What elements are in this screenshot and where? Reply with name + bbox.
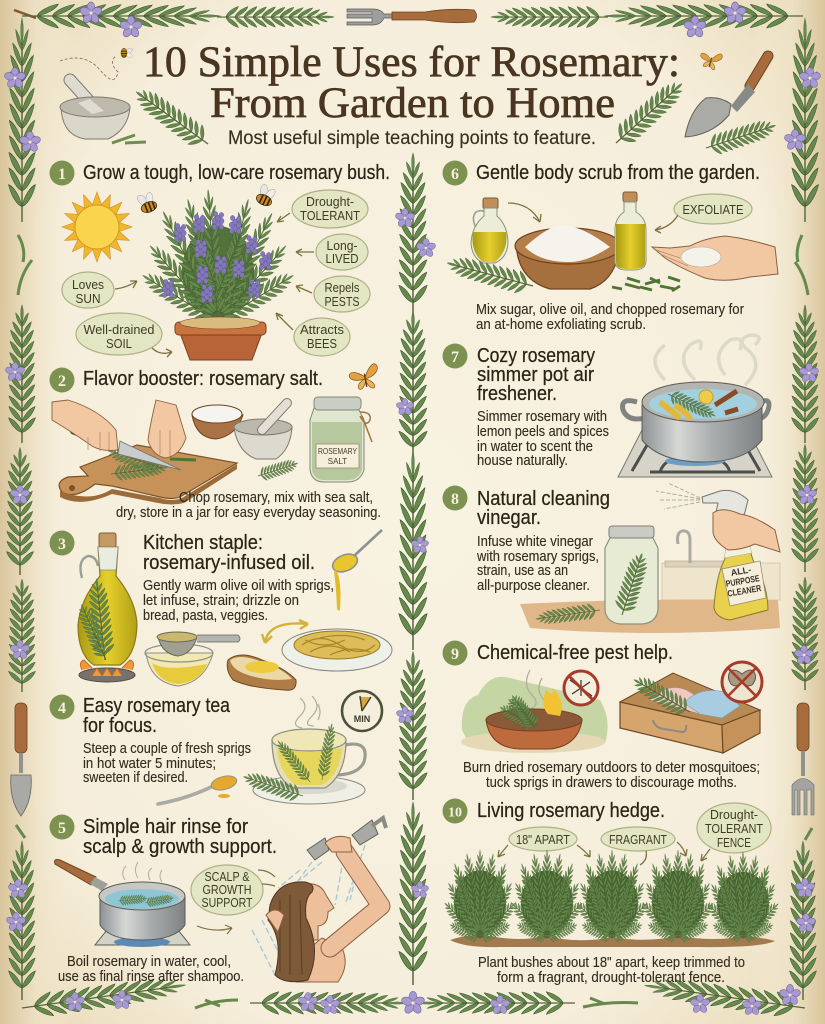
icon: bee right	[253, 181, 279, 208]
step 8 number: 8	[451, 491, 459, 508]
bottle label text: PURPOSE	[725, 573, 760, 589]
icon: spoon drizzling oil	[330, 530, 382, 611]
step 6 number	[442, 160, 468, 186]
bottle label text: CLEANER	[727, 583, 762, 599]
bottle label text	[723, 563, 762, 599]
step 5 number: 5	[58, 820, 66, 837]
arrow to pot	[152, 348, 172, 357]
step 3 body: bread, pasta, veggies.	[143, 608, 268, 624]
step 5: hair rinse	[50, 814, 386, 985]
step 4 body: in hot water 5 minutes;	[83, 756, 216, 772]
arm fill	[330, 852, 381, 948]
border: top rosemary garland	[14, 2, 803, 38]
icon: garden fork right	[792, 703, 814, 815]
step 10 number	[442, 798, 468, 824]
plate of pasta	[282, 629, 392, 671]
step 8 body: Infuse white vinegar	[477, 534, 593, 550]
step 6 heading: Gentle body scrub from the garden.	[476, 161, 760, 184]
callout: drought tolerant fence: Drought-	[710, 808, 758, 822]
icon: mortar and pestle	[60, 80, 146, 143]
callout: scalp and growth support	[191, 865, 263, 915]
step 2: rosemary salt	[50, 363, 381, 521]
subtitle: Most useful simple teaching points to feature.	[228, 128, 596, 149]
callout: attracts bees: BEES	[307, 337, 337, 351]
kitchen sink backdrop	[662, 531, 780, 600]
callout: long lived	[316, 234, 368, 270]
arrow to bush	[277, 213, 290, 222]
step 8 heading: vinegar.	[477, 506, 541, 529]
arrows to hair	[197, 870, 275, 934]
step 5 heading: Simple hair rinse for	[83, 815, 248, 838]
callout: loves sun: SUN	[76, 292, 100, 306]
step 5 number	[50, 814, 74, 840]
step 6 body: an at-home exfoliating scrub.	[476, 317, 646, 333]
wooden table	[520, 600, 780, 633]
icon: garden fork top	[347, 9, 476, 25]
border: right column	[784, 18, 821, 1000]
step 4: rosemary tea	[50, 691, 382, 805]
curved arrow to pasta	[262, 620, 308, 643]
step 7 body: lemon peels and spices	[477, 424, 609, 440]
step 3 number	[50, 530, 74, 556]
step 10 body: form a fragrant, drought-tolerant fence.	[497, 970, 725, 986]
step 8 number	[442, 486, 468, 510]
hair strands	[280, 895, 302, 975]
step 4 number: 4	[58, 700, 66, 717]
step 5 heading	[83, 815, 277, 858]
step 8 body: with rosemary sprigs,	[476, 549, 599, 565]
step 6: body scrub	[442, 160, 778, 333]
callout: fragrant: FRAGRANT	[609, 833, 667, 847]
callout: attracts bees: Attracts	[300, 323, 344, 337]
hair	[268, 882, 315, 982]
rosemary hedge bushes	[441, 850, 782, 945]
step 2 body: dry, store in a jar for easy everyday seasoning.	[116, 505, 381, 521]
step 4 body	[83, 741, 251, 786]
step 2 body: Chop rosemary, mix with sea salt,	[179, 490, 373, 506]
icon: 5 minute timer: MIN	[354, 714, 370, 724]
step 3: infused oil	[50, 530, 392, 690]
step 5 heading: scalp & growth support.	[83, 835, 277, 858]
mortar with pestle	[234, 403, 292, 459]
open hand holding scrub	[652, 236, 778, 280]
rosemary on table	[535, 602, 601, 627]
smoke	[526, 670, 548, 712]
callout: drought tolerant fence: TOLERANT	[705, 822, 763, 836]
step 8 heading: Natural cleaning	[477, 487, 610, 510]
hand on sprayer	[713, 510, 780, 552]
icon: butterfly	[348, 363, 381, 392]
callout: loves sun	[62, 272, 114, 308]
honey spoon	[158, 774, 238, 804]
step 4 heading: for focus.	[83, 714, 157, 737]
saucepan on stove	[55, 860, 190, 947]
step 9 number: 9	[451, 646, 459, 663]
callout: drought tolerant: Drought-	[306, 195, 354, 209]
step 7 heading: Cozy rosemary	[477, 344, 596, 367]
step 3 heading: Kitchen staple:	[143, 531, 263, 554]
arrow to bush	[115, 281, 137, 289]
step 6 body	[476, 302, 744, 333]
arrow to bottle	[655, 215, 678, 233]
step 1 number: 1	[58, 166, 66, 183]
bread with oil	[227, 655, 296, 690]
arrow to bush	[296, 249, 314, 256]
step 7 body: in water to scent the	[477, 439, 593, 455]
drawer with linens and rosemary	[620, 670, 760, 753]
arrow into bowl	[508, 203, 541, 222]
step 7: simmer pot	[442, 335, 772, 477]
face	[298, 884, 334, 940]
step 9: pest help	[442, 640, 762, 791]
step 3 heading: rosemary-infused oil.	[143, 551, 315, 574]
step 2 heading: Flavor booster: rosemary salt.	[83, 367, 323, 390]
step 5 body: Boil rosemary in water, cool,	[67, 954, 231, 970]
step 7 heading	[477, 344, 596, 405]
hand in hair	[266, 910, 284, 932]
woman rinsing hair	[266, 852, 381, 982]
icon: no moths sign	[722, 662, 762, 702]
step 7 heading: freshener.	[477, 382, 557, 405]
mason jar with rosemary	[605, 526, 658, 624]
icon: butterfly top	[698, 49, 723, 71]
callout: repels pests: Repels	[324, 281, 360, 295]
callout: well drained soil: SOIL	[106, 337, 132, 351]
callout: drought tolerant fence	[697, 803, 771, 853]
olive oil jug	[471, 198, 508, 263]
icon: 5 minute timer	[342, 691, 382, 731]
bottle label text: ALL-	[730, 564, 752, 578]
callout: drought tolerant fence: FENCE	[717, 836, 751, 850]
jar of rosemary salt	[310, 397, 372, 482]
tea cup and saucer	[253, 722, 365, 804]
step 4 body: Steep a couple of fresh sprigs	[83, 741, 251, 757]
terracotta bowl with burning rosemary	[486, 688, 582, 749]
step 10: hedge	[441, 798, 782, 986]
callout: repels pests	[314, 276, 370, 312]
rosemary sprig	[444, 251, 536, 298]
step 9 number	[442, 640, 468, 666]
step 8 heading	[477, 487, 610, 529]
jar label text: SALT	[328, 457, 347, 466]
soil strip	[450, 935, 775, 947]
callout: repels pests: PESTS	[324, 295, 360, 309]
callout: 18 inches apart: 18" APART	[516, 833, 570, 847]
step 9 body	[463, 760, 760, 791]
step 10 body	[478, 955, 745, 986]
step 7 number	[442, 344, 468, 368]
step 4 heading	[83, 694, 231, 737]
icon: no mosquitoes sign	[564, 671, 598, 705]
spray mist	[656, 483, 700, 509]
hands	[52, 400, 186, 458]
chopped rosemary on board	[104, 441, 169, 482]
step 10 number: 10	[448, 806, 462, 820]
jar label text: ROSEMARY	[318, 447, 358, 456]
arm outline	[330, 852, 381, 948]
callout: loves sun: Loves	[72, 278, 104, 292]
step 1: grow a bush	[50, 160, 390, 360]
icon: rosemary sprig by trowel	[702, 114, 779, 159]
step 4 number	[50, 694, 74, 720]
infused oil bottle on burner	[73, 533, 137, 682]
callout: fragrant	[601, 827, 675, 851]
callout: scalp and growth support: GROWTH	[202, 883, 252, 897]
simmer pot	[623, 382, 769, 462]
step 1 heading: Grow a tough, low-care rosemary bush.	[83, 161, 390, 184]
step 7 heading: simmer pot air	[477, 363, 594, 386]
knife	[69, 426, 181, 470]
title: 10 Simple Uses for Rosemary:	[143, 39, 680, 86]
step 5 body	[58, 954, 244, 985]
step 6 body: Mix sugar, olive oil, and chopped rosemary for	[476, 302, 744, 318]
step 2 number: 2	[58, 373, 66, 390]
step 7 body: Simmer rosemary with	[477, 409, 607, 425]
title: From Garden to Home	[210, 80, 615, 127]
step 10 body: Plant bushes about 18" apart, keep trimmed to	[478, 955, 745, 971]
shower spray	[252, 845, 365, 975]
callout: well drained soil: Well-drained	[84, 323, 155, 337]
cutting board	[59, 445, 237, 504]
step 8: cleaning vinegar	[442, 483, 780, 633]
strainer over bowl of oil	[145, 632, 240, 686]
step 2 number	[50, 368, 74, 392]
icon: bee with dashed flight path	[60, 47, 134, 80]
jar label text	[318, 447, 358, 466]
step 3 heading	[143, 531, 315, 574]
arrow to bush	[276, 313, 293, 330]
border: centre rosemary column	[395, 153, 436, 985]
callout: long lived: Long-	[326, 239, 358, 253]
rosemary sprig at saucer	[240, 768, 306, 805]
rosemary bush	[138, 189, 298, 332]
step 9 body: tuck sprigs in drawers to discourage moths.	[486, 775, 737, 791]
icon: trowel top right	[685, 56, 768, 137]
callout: 18 inches apart	[509, 827, 577, 851]
callout: drought tolerant	[292, 190, 368, 228]
step 3 body: Gently warm olive oil with sprigs,	[143, 578, 334, 594]
step 9 body: Burn dried rosemary outdoors to deter mosquitoes;	[463, 760, 760, 776]
callout: long lived: LIVED	[326, 252, 358, 266]
title	[143, 39, 680, 127]
step 3 body	[143, 578, 334, 624]
wooden bowl of sugar	[515, 225, 621, 289]
step 4 body: sweeten if desired.	[83, 770, 188, 786]
step 2 body	[116, 490, 381, 521]
step 3 body: let infuse, strain; drizzle on	[143, 593, 299, 609]
oil bottle	[615, 192, 646, 270]
step 4 heading: Easy rosemary tea	[83, 694, 231, 717]
step 7 number: 7	[451, 349, 459, 366]
step 7 body	[477, 409, 609, 469]
steam	[295, 696, 320, 728]
callout: exfoliate: EXFOLIATE	[682, 203, 744, 217]
step 1 number	[50, 160, 74, 186]
icon: shower heads	[307, 818, 386, 860]
chopped rosemary pile	[612, 277, 680, 291]
callout: well drained soil	[76, 313, 162, 355]
icon: rosemary sprig left of title	[128, 81, 216, 155]
callout: drought tolerant: TOLERANT	[300, 209, 360, 223]
terracotta pot	[175, 317, 266, 360]
step 10 heading: Living rosemary hedge.	[477, 799, 665, 822]
steam swirls	[655, 335, 759, 385]
callout: exfoliate	[674, 194, 752, 224]
callout: attracts bees	[294, 318, 350, 356]
torso	[296, 938, 345, 982]
border: left column	[4, 18, 41, 1000]
border: bottom garland	[20, 972, 807, 1021]
bowl of salt	[192, 405, 243, 439]
step 8 body: all-purpose cleaner.	[477, 578, 590, 594]
stove grate	[618, 430, 772, 477]
step 3 number: 3	[58, 536, 66, 553]
step 8 body	[476, 534, 599, 594]
icon: rosemary sprig right of title	[607, 74, 691, 153]
arrow to bush	[296, 285, 312, 293]
spray bottle all purpose cleaner	[702, 490, 768, 620]
icon: sun	[62, 192, 132, 262]
callout: scalp and growth support: SCALP &	[204, 870, 250, 884]
icon: hand trowel left	[11, 703, 31, 816]
outdoor scene with shrubs	[461, 677, 608, 753]
arrows to bushes	[498, 842, 710, 865]
icon: bee left	[134, 189, 159, 215]
step 8 body: strain, use as an	[477, 563, 568, 579]
callout: scalp and growth support: SUPPORT	[202, 896, 253, 910]
small sprig	[256, 456, 300, 483]
step 6 number: 6	[451, 166, 459, 183]
step 5 body: use as final rinse after shampoo.	[58, 969, 244, 985]
step 9 heading: Chemical-free pest help.	[477, 641, 673, 664]
step 7 body: house naturally.	[477, 453, 568, 469]
